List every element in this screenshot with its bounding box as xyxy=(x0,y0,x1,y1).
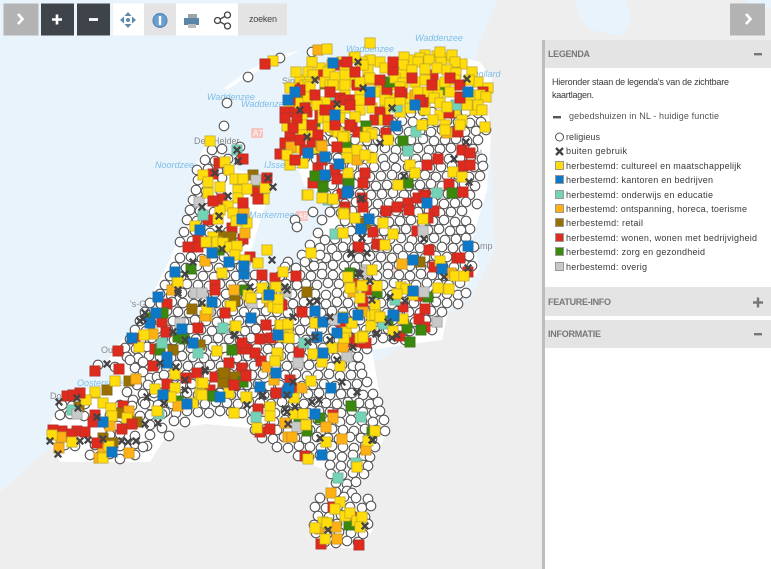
netherlands land xyxy=(46,52,492,548)
map labels: water and places: Do xyxy=(50,391,62,401)
legend layer title: gebedshuizen in NL - huidige functie xyxy=(569,111,719,121)
sidebar xyxy=(542,40,771,569)
button: expand xyxy=(4,4,38,36)
map labels: water and places: Sint-A xyxy=(282,76,307,86)
button: print xyxy=(176,4,208,36)
button: info xyxy=(144,4,176,36)
button: zoom out xyxy=(77,4,110,36)
panel: legenda header xyxy=(545,40,771,68)
legend intro text xyxy=(552,77,729,100)
map labels: water and places: pel xyxy=(470,148,482,158)
map labels: water and places: Markermeer xyxy=(249,210,299,220)
map labels: water and places: Waddenzee xyxy=(415,33,463,43)
road shield A6: A6 xyxy=(298,212,308,221)
map labels: water and places: 's-Gravenhage xyxy=(130,299,189,309)
map labels: water and places: Oosterschelde xyxy=(77,378,135,388)
road shield A7: A7 xyxy=(253,129,263,138)
map labels: water and places: Waddenzee xyxy=(346,44,394,54)
toolbar xyxy=(4,4,287,36)
item: kantoren: herbestemd: kantoren en bedrijven xyxy=(566,175,713,185)
button: search: zoeken xyxy=(249,14,277,24)
panel: informatie header: INFORMATIE xyxy=(548,329,601,339)
item: buiten gebruik: buiten gebruik xyxy=(566,146,628,156)
button: pan xyxy=(113,4,144,36)
road shield A1: A1 xyxy=(391,266,401,275)
legend list xyxy=(556,132,757,272)
out of use: cross markers xyxy=(50,62,469,530)
map labels: water and places: Ou xyxy=(101,345,113,355)
map labels: water and places: Waddenzee xyxy=(207,92,255,102)
panel: feature-info header: FEATURE-INFO xyxy=(548,297,611,307)
map labels: water and places: Amp xyxy=(474,241,493,251)
item: retail: herbestemd: retail xyxy=(566,218,643,228)
item: zorg: herbestemd: zorg en gezondheid xyxy=(566,247,705,257)
map labels: water and places: Dollard xyxy=(472,69,502,79)
button: search xyxy=(238,4,287,36)
map labels: water and places: Waddenzee xyxy=(241,99,289,109)
map labels: water and places: Noordzee xyxy=(155,160,194,170)
yellow markers xyxy=(52,43,486,539)
map labels: water and places: IJsselmeer xyxy=(264,160,309,170)
legend intro text: kaartlagen. xyxy=(552,90,594,100)
red markers on top xyxy=(73,62,460,443)
legend intro text: Hieronder staan de legenda's van de zichtbare xyxy=(552,77,729,87)
item: religieus: religieus xyxy=(566,132,600,142)
panel: informatie header xyxy=(545,320,771,348)
yellow fill markers in the north xyxy=(290,55,488,165)
panel: legenda header: LEGENDA xyxy=(548,49,590,59)
button: share xyxy=(208,4,238,36)
button: zoom in xyxy=(41,4,74,36)
panel: feature-info header xyxy=(545,287,771,316)
item: wonen: herbestemd: wonen, wonen met bedrijvigheid xyxy=(566,233,757,243)
religious buildings: white circle markers xyxy=(58,52,486,543)
brown, green, teal, grey, orange markers xyxy=(59,50,456,539)
map labels: water and places xyxy=(50,33,502,401)
map labels: water and places: Den Helder xyxy=(194,136,240,146)
item: onderwijs: herbestemd: onderwijs en educatie xyxy=(566,190,713,200)
item: cultureel: herbestemd: cultureel en maatschappelijk xyxy=(566,161,742,171)
item: overig: herbestemd: overig xyxy=(566,262,647,272)
red markers xyxy=(53,62,483,545)
item: ontspanning: herbestemd: ontspanning, horeca, toerisme xyxy=(566,204,747,214)
button: right panel toggle xyxy=(730,4,765,36)
blue markers xyxy=(103,63,468,455)
